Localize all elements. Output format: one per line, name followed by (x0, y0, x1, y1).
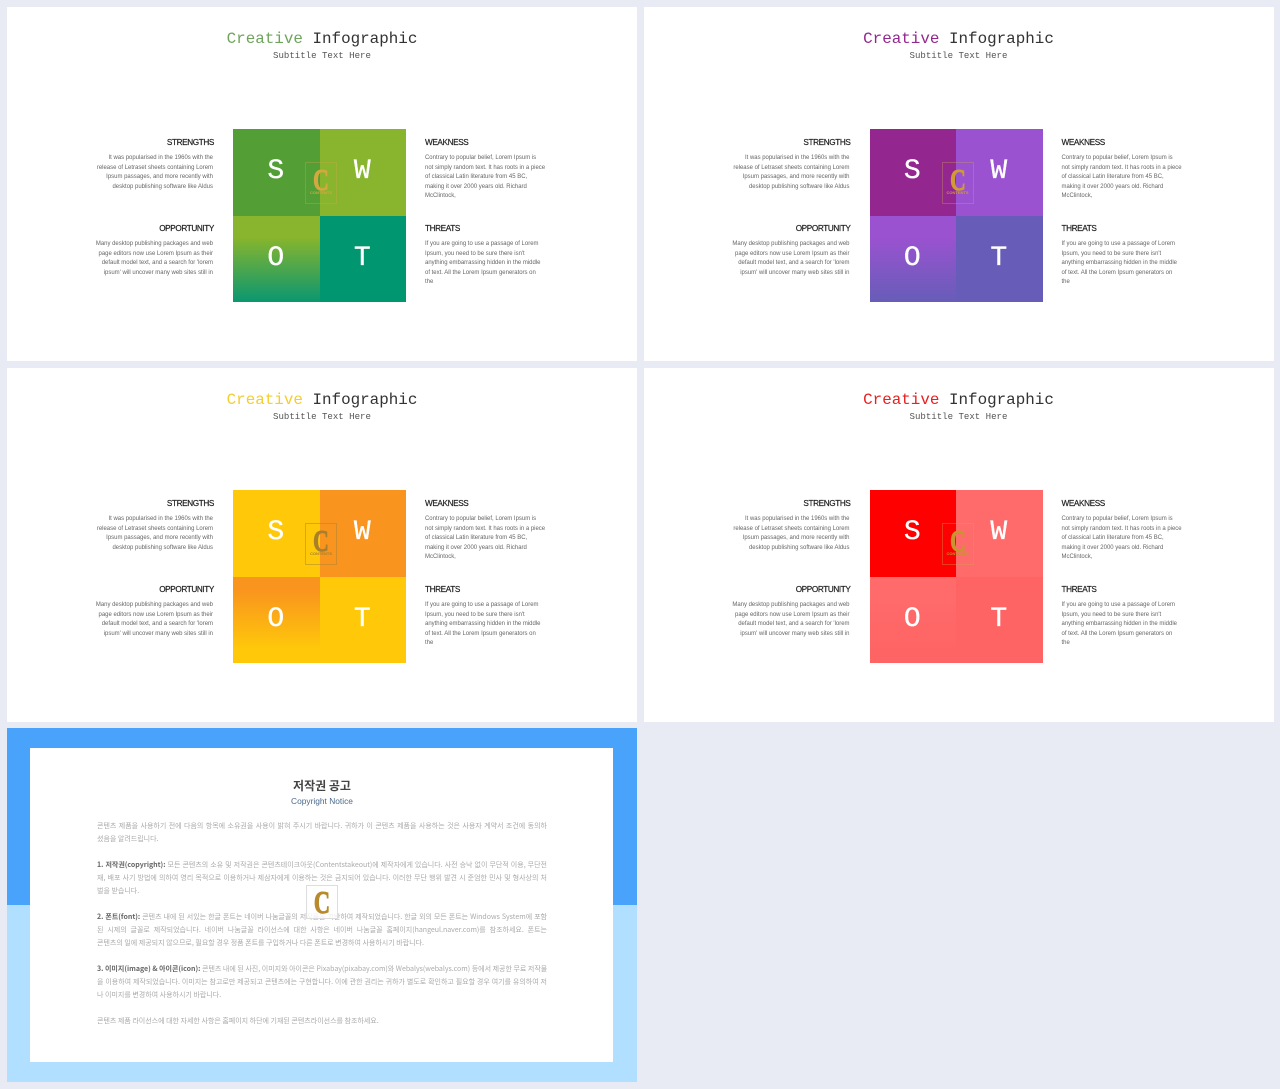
text: weakness: not simply random text. It has roots in a piece (425, 526, 545, 532)
text: weakness: McClintock, (1062, 193, 1092, 199)
text: threats: of text. All the Lorem Ipsum generators on (425, 631, 536, 637)
icon: gold logo: C (950, 162, 965, 197)
quadrant W: W (990, 156, 1007, 187)
text: threats: If you are going to use a passage of Lorem (425, 602, 538, 608)
text: weakness: making it over 2000 years old. Richard (425, 545, 527, 551)
quadrant T: T (354, 604, 371, 634)
quadrant T: T (990, 242, 1007, 274)
quadrant S: S (904, 156, 921, 187)
text: section 1 copyright: 재, 배포 사기 방법에 의하여 영리 목적으로 이용하거나 제삼자에게 이용하는 것은 금지되어 있습니다. 이러한 무단 행위 발견 시 준엄한 민사 및 형사상의 처 (97, 873, 547, 883)
text: opportunity (732, 602, 850, 637)
subtitle: Subtitle Text Here (910, 50, 1007, 61)
text: introduction (97, 821, 547, 844)
text: strengths: desktop publishing software like Aldus (112, 184, 213, 190)
quadrant T (320, 216, 406, 302)
quadrant W: W (354, 156, 371, 187)
text: threats: the (425, 640, 433, 646)
text: opportunity: default model text, and a search for 'lorem (102, 621, 213, 627)
text: opportunity: page editors now use Lorem Ipsum as their (735, 612, 850, 618)
icon: gold logo: CONTENTS (310, 190, 332, 195)
text: threats (1062, 602, 1177, 646)
quadrant W: W (990, 517, 1007, 548)
quadrant W (320, 129, 406, 216)
text: strengths: release of Letraset sheets containing Lorem (97, 165, 213, 171)
text: weakness: of classical Latin literature from 45 BC, (425, 174, 527, 180)
text: strengths: Ipsum passages, and more recently with (743, 174, 850, 180)
text: section 1 copyright (97, 860, 547, 896)
text: strengths: Ipsum passages, and more recently with (106, 535, 213, 541)
text: section 1 copyright: 1. 저작권(copyright): 모든 콘텐츠의 소유 및 저작권은 콘텐츠테이크아웃(Contentstakeout)에 제작자에게 있습니다. 사전 승낙 없이 무단적 이용, 무단전 (97, 860, 547, 870)
SWOT matrix (870, 490, 1043, 663)
quadrant T (956, 216, 1042, 302)
subtitle: Subtitle Text Here (273, 50, 371, 61)
panel: red SWOT slide (644, 368, 1274, 722)
heading: opportunity: OPPORTUNITY (796, 585, 850, 594)
quadrant S: S (267, 517, 284, 548)
text: introduction: 셨음을 알려드립니다. (97, 834, 158, 844)
text: strengths: It was popularised in the 1960s with the (745, 516, 850, 522)
heading: strengths: STRENGTHS (803, 499, 850, 508)
SWOT matrix (233, 129, 406, 302)
text: opportunity: Many desktop publishing packages and web (732, 602, 850, 608)
title: Creative Infographic (227, 30, 417, 48)
text: opportunity: default model text, and a search for 'lorem (102, 260, 213, 266)
text: strengths: release of Letraset sheets containing Lorem (97, 526, 213, 532)
quadrant S (233, 490, 320, 576)
text: section 3 image and icon: 을 이용하여 제작되었습니다. 이미지는 참고로만 제공되고 콘텐츠에는 구현합니다. 이에 관한 권리는 귀하가 별도로 확인하고 필요할 경우 여기를 유의하여 저 (97, 977, 547, 987)
icon: gold logo: CONTENTS (946, 551, 968, 556)
heading: threats: THREATS (1062, 585, 1096, 594)
text: threats: If you are going to use a passage of Lorem (1062, 602, 1175, 608)
text: section 3 image and icon: 3. 이미지(image) & 아이콘(icon): 콘텐츠 내에 된 사진, 이미지와 아이콘은 Pixabay(pixabay.com)와 Webalys(webalys.com) 등에서 제공한 무료 저작물 (97, 964, 547, 974)
quadrant T: T (990, 604, 1007, 634)
quadrant O (870, 216, 956, 302)
quadrant O: O (267, 604, 284, 634)
text: section 3 image and icon: 나 이미지를 변경하여 사용하시기 바랍니다. (97, 990, 221, 1000)
text: opportunity: default model text, and a search for 'lorem (738, 260, 850, 266)
heading: strengths: STRENGTHS (167, 499, 214, 508)
panel: copyright notice slide (7, 728, 637, 1082)
heading: opportunity: OPPORTUNITY (796, 224, 850, 233)
text: strengths (733, 154, 850, 190)
quadrant W (320, 490, 406, 576)
text: strengths: release of Letraset sheets containing Lorem (733, 165, 850, 171)
quadrant W (956, 129, 1042, 216)
text: strengths: It was popularised in the 1960s with the (108, 516, 213, 522)
icon: gold logo (942, 162, 974, 204)
subtitle: Subtitle Text Here (273, 411, 371, 422)
text: weakness (1062, 154, 1182, 199)
text: strengths (97, 154, 213, 190)
text: weakness: not simply random text. It has roots in a piece (425, 165, 545, 171)
text: threats: the (1062, 640, 1070, 646)
quadrant T: T (354, 242, 371, 274)
text: opportunity: page editors now use Lorem Ipsum as their (99, 251, 213, 257)
text: weakness: making it over 2000 years old. Richard (425, 184, 527, 190)
heading: threats: THREATS (425, 585, 460, 594)
quadrant O (233, 216, 320, 302)
subtitle: Subtitle Text Here (910, 411, 1007, 422)
text: opportunity: Many desktop publishing packages and web (96, 241, 213, 247)
quadrant O (233, 576, 320, 663)
text: weakness: Contrary to popular belief, Lorem Ipsum is (425, 155, 536, 161)
title: Creative Infographic (863, 391, 1054, 409)
text: opportunity: ipsum' will uncover many web sites still in (104, 270, 213, 276)
text: weakness: Contrary to popular belief, Lorem Ipsum is (1062, 155, 1173, 161)
text: threats: If you are going to use a passage of Lorem (425, 241, 538, 247)
icon: gold logo: CONTENTS (310, 551, 332, 556)
text: strengths: release of Letraset sheets containing Lorem (733, 526, 850, 532)
quadrant S (870, 490, 956, 576)
heading: weakness: WEAKNESS (425, 138, 468, 147)
quadrant O: O (904, 242, 921, 274)
text: introduction: 콘텐츠 제품을 사용하기 전에 다음의 항목에 소유권을 사용이 밝혀 주시기 바랍니다. 귀하가 이 콘텐츠 제품을 사용하는 것은 사용자 계약서 조건에 동의하 (97, 821, 547, 831)
heading: strengths: STRENGTHS (803, 138, 850, 147)
quadrant O: O (267, 242, 284, 274)
text: strengths: It was popularised in the 1960s with the (745, 155, 850, 161)
icon: gold logo: CONTENTS (946, 190, 968, 195)
text: section 3 image and icon (97, 964, 547, 1000)
text: threats: of text. All the Lorem Ipsum generators on (1062, 270, 1172, 276)
icon: gold logo (942, 523, 974, 565)
text: weakness: Contrary to popular belief, Lorem Ipsum is (1062, 516, 1173, 522)
icon: gold logo (306, 885, 338, 919)
panel: purple SWOT slide (644, 7, 1274, 361)
icon: gold logo (305, 523, 337, 565)
text: threats: anything embarrassing hidden in the middle (425, 260, 540, 266)
icon: gold logo (305, 162, 337, 204)
text: opportunity: page editors now use Lorem Ipsum as their (735, 251, 850, 257)
text: strengths (97, 516, 213, 551)
heading: strengths: STRENGTHS (167, 138, 214, 147)
text: threats (425, 240, 540, 285)
text: section 1 copyright: 벌을 받습니다. (97, 886, 139, 896)
text: strengths (733, 516, 850, 551)
quadrant O (870, 576, 956, 663)
text: threats: Ipsum, you need to be sure there isn't (425, 612, 525, 618)
text: opportunity: ipsum' will uncover many web sites still in (740, 270, 850, 276)
text: opportunity (96, 240, 213, 276)
text: threats: anything embarrassing hidden in the middle (425, 621, 540, 627)
white notice card (30, 748, 613, 1062)
text: threats: the (1062, 279, 1070, 285)
quadrant S (870, 129, 956, 216)
text: weakness: making it over 2000 years old. Richard (1062, 545, 1163, 551)
text: strengths: desktop publishing software like Aldus (112, 545, 213, 551)
text: strengths: Ipsum passages, and more recently with (743, 535, 850, 541)
panel: green SWOT slide (7, 7, 637, 361)
SWOT matrix (233, 490, 406, 663)
SWOT matrix (870, 129, 1043, 302)
text: weakness: Contrary to popular belief, Lorem Ipsum is (425, 516, 536, 522)
text: strengths: Ipsum passages, and more recently with (106, 174, 213, 180)
text: section 2 font: 2. 폰트(font): 콘텐츠 내에 된 서있는 한글 폰트는 네이버 나눔글꼴의 저작물을 기반하여 제작되었습니다. 한글 외의 모든 폰트는 Windows System에 포함 (97, 912, 547, 922)
text: strengths: desktop publishing software like Aldus (749, 184, 850, 190)
blue upper background band (7, 728, 637, 905)
heading: opportunity: OPPORTUNITY (159, 224, 214, 233)
text: threats: anything embarrassing hidden in the middle (1062, 260, 1177, 266)
quadrant T (956, 576, 1042, 663)
text: threats: If you are going to use a passage of Lorem (1062, 241, 1175, 247)
title: Creative Infographic (227, 391, 417, 409)
text: weakness: of classical Latin literature from 45 BC, (1062, 174, 1164, 180)
quadrant S: S (904, 517, 921, 548)
text: threats: Ipsum, you need to be sure there isn't (1062, 251, 1161, 257)
text: weakness (425, 516, 545, 560)
text: opportunity: Many desktop publishing packages and web (96, 602, 213, 608)
text: strengths: It was popularised in the 1960s with the (108, 155, 213, 161)
subheading: Copyright Notice: Copyright Notice (291, 796, 353, 806)
text: opportunity: page editors now use Lorem Ipsum as their (99, 612, 213, 618)
text: opportunity: ipsum' will uncover many web sites still in (104, 631, 213, 637)
text: weakness: of classical Latin literature from 45 BC, (425, 535, 527, 541)
text: weakness (1062, 516, 1182, 560)
title: Creative Infographic (863, 30, 1054, 48)
text: weakness: of classical Latin literature from 45 BC, (1062, 535, 1164, 541)
text: opportunity: ipsum' will uncover many web sites still in (740, 631, 850, 637)
text: closing note: 콘텐츠 제품 라이선스에 대한 자세한 사항은 홈페이지 하단에 기재된 콘텐츠라이선스를 참조하세요. (97, 1016, 379, 1026)
text: section 2 font: 된 시제의 글꼴로 제작되었습니다. 네이버 나눔글꼴 라이선스에 대한 사항은 네이버 나눔글꼴 홈페이지(hangeul.naver.com)를 참조하세요. 폰트는 (97, 925, 547, 935)
quadrant S (233, 129, 320, 216)
quadrant W (956, 490, 1042, 576)
panel: yellow SWOT slide (7, 368, 637, 722)
icon: gold logo: C (313, 523, 329, 558)
text: section 2 font (97, 912, 547, 948)
text: strengths: desktop publishing software like Aldus (749, 545, 850, 551)
heading: opportunity: OPPORTUNITY (159, 585, 214, 594)
text: opportunity (96, 602, 213, 637)
text: threats: the (425, 279, 433, 285)
text: opportunity: default model text, and a search for 'lorem (738, 621, 850, 627)
text: threats: of text. All the Lorem Ipsum generators on (1062, 631, 1172, 637)
heading: threats: THREATS (425, 224, 460, 233)
heading: threats: THREATS (1062, 224, 1096, 233)
heading: copyright title: 저작권 공고 (293, 777, 351, 794)
text: weakness: making it over 2000 years old. Richard (1062, 184, 1163, 190)
text: weakness: not simply random text. It has roots in a piece (1062, 165, 1182, 171)
text: section 2 font: 콘텐츠의 일에 제공되지 않으므로, 필요할 경우 정품 폰트를 구입하거나 다른 폰트로 변경하여 사용하시기 바랍니다. (97, 938, 424, 948)
text: threats: of text. All the Lorem Ipsum generators on (425, 270, 536, 276)
text: weakness (425, 154, 545, 199)
text: threats: anything embarrassing hidden in the middle (1062, 621, 1177, 627)
heading: weakness: WEAKNESS (1062, 138, 1105, 147)
text: threats: Ipsum, you need to be sure there isn't (1062, 612, 1161, 618)
text: opportunity (732, 240, 850, 276)
text: weakness: McClintock, (425, 193, 456, 199)
text: threats (425, 602, 540, 646)
heading: weakness: WEAKNESS (425, 499, 468, 508)
icon: gold logo: C (313, 162, 329, 197)
text: weakness: McClintock, (1062, 554, 1092, 560)
heading: weakness: WEAKNESS (1062, 499, 1105, 508)
text: threats: Ipsum, you need to be sure there isn't (425, 251, 525, 257)
quadrant T (320, 576, 406, 663)
quadrant S: S (267, 156, 284, 187)
text: opportunity: Many desktop publishing packages and web (732, 241, 850, 247)
text: threats (1062, 240, 1177, 285)
text: weakness: McClintock, (425, 554, 456, 560)
text: weakness: not simply random text. It has roots in a piece (1062, 526, 1182, 532)
quadrant O: O (904, 604, 921, 634)
icon: gold logo: C (950, 523, 965, 558)
quadrant W: W (354, 517, 371, 548)
